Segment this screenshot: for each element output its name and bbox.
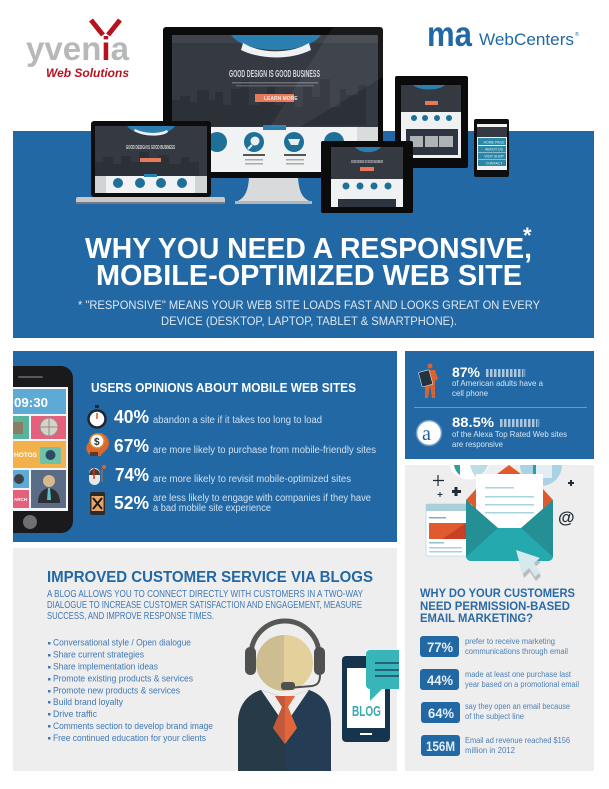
stat row: 40%: abandon a site if it takes too long to load <box>153 415 322 426</box>
text: blog intro: A BLOG ALLOWS YOU TO CONNECT DIRECTLY WITH CUSTOMERS IN A TWO-WAY <box>47 589 363 600</box>
stat: 44%: made at least one purchase last <box>465 670 572 679</box>
stat: 156M: Email ad revenue reached $156 <box>465 736 570 745</box>
heading: users opinions: USERS OPINIONS ABOUT MOBILE WEB SITES <box>91 381 356 395</box>
illustration: email envelope <box>426 465 575 581</box>
stat row: 52%: are less likely to engage with companies if they have <box>153 493 372 504</box>
list: blog benefits: Drive traffic <box>53 709 97 719</box>
panel: blogs <box>13 548 399 771</box>
stat row: 40%: 40% <box>114 406 149 427</box>
stat row: 74% <box>89 464 351 485</box>
list: blog benefits: Promote new products & services <box>53 686 180 696</box>
illustration: email envelope: @ <box>558 508 575 527</box>
stat row: 67%: 67% <box>114 435 149 456</box>
title: WHY YOU NEED A RESPONSIVE, <box>85 233 532 265</box>
title <box>85 223 532 292</box>
device: landscape tablet: GOOD DESIGN IS GOOD BUSINESS <box>351 159 383 164</box>
stat: 64%: say they open an email because <box>465 702 570 711</box>
stat: 88.5%: are responsive <box>452 440 503 449</box>
text: blog intro: SUCCESS, AND IMPROVE RESPONSE TIMES. <box>47 611 214 622</box>
device: smartphone: ABOUT US <box>485 148 504 152</box>
subtitle: * "RESPONSIVE" MEANS YOUR WEB SITE LOADS FAST AND LOOKS GREAT ON EVERY <box>78 298 540 312</box>
stat: 64%: 64% <box>428 705 455 721</box>
stat row: 67% <box>86 433 376 456</box>
device: laptop <box>76 121 225 204</box>
stat: 44%: year based on a promotional email <box>465 680 579 689</box>
logo: yvenia Web Solutions: Web Solutions <box>46 68 129 80</box>
heading: email marketing: NEED PERMISSION-BASED <box>420 599 570 613</box>
logo: yvenia Web Solutions: yvenia <box>26 30 130 67</box>
text: blog intro: DIALOGUE TO INCREASE CUSTOMER SATISFACTION AND ENGAGEMENT, MEASURE <box>47 600 362 611</box>
stat row: 52% <box>90 492 372 515</box>
logo: MA WebCenters <box>427 15 579 54</box>
stat row: 52%: a bad mobile site experience <box>153 503 272 514</box>
list: blog benefits: Promote existing products & services <box>53 674 193 684</box>
stat: 77%: prefer to receive marketing <box>465 637 555 646</box>
device: desktop monitor: LEARN MORE <box>264 96 298 102</box>
stat: 77%: communications through email <box>465 647 568 656</box>
icon: Alexa logo: a <box>422 423 431 445</box>
stat row: 52%: 52% <box>114 492 149 513</box>
stat: 88.5%: 88.5% <box>452 414 495 430</box>
illustration: phone with tiles: HOTOS <box>14 452 38 459</box>
list: blog benefits: Share implementation ideas <box>53 662 158 672</box>
list: blog benefits: Build brand loyalty <box>53 697 123 707</box>
illustration: phone with tiles <box>13 366 73 533</box>
illustration: phone with BLOG speech bubble: BLOG <box>352 703 381 720</box>
panel: cell phone and Alexa stats <box>405 351 594 459</box>
list: blog benefits: Share current strategies <box>53 650 144 660</box>
stat: 87%: cell phone <box>452 389 488 398</box>
illustration: support agent with headset <box>238 621 331 771</box>
device: landscape tablet <box>321 141 413 213</box>
illustration: phone with tiles: ARCH <box>14 497 27 502</box>
stat: 156M: 156M <box>426 739 455 754</box>
device: smartphone: CONTACT <box>486 162 503 166</box>
device: smartphone: VISIT SHOP <box>484 154 504 158</box>
stat: 87%: 87% <box>452 364 481 380</box>
subtitle <box>78 298 540 328</box>
panel: email marketing <box>405 465 594 771</box>
logo: MA WebCenters: WebCenters <box>479 30 574 49</box>
panel: hero background <box>13 131 594 338</box>
device: laptop: GOOD DESIGN IS GOOD BUSINESS <box>126 145 175 151</box>
stat row: 74%: are more likely to revisit mobile-optimized sites <box>153 474 351 485</box>
stat: 44%: 44% <box>427 672 454 688</box>
stat: 88.5% <box>452 414 567 449</box>
stat: 77%: 77% <box>427 639 454 655</box>
title: * <box>523 223 532 248</box>
title: MOBILE-OPTIMIZED WEB SITE <box>96 260 522 292</box>
heading: blogs: IMPROVED CUSTOMER SERVICE VIA BLOGS <box>47 569 373 586</box>
heading: email marketing <box>420 586 575 625</box>
stat: 64% <box>421 702 570 723</box>
text: blog intro <box>47 589 363 622</box>
stat: 87% <box>452 364 543 398</box>
stat row: 67%: are more likely to purchase from mobile-friendly sites <box>153 445 376 456</box>
logo: yvenia Web Solutions <box>26 20 130 80</box>
stat: 77% <box>420 636 568 657</box>
stat: 64%: of the subject line <box>465 712 525 721</box>
panel: users opinions <box>13 351 397 542</box>
illustration: phone with tiles: 09:30 <box>14 395 48 410</box>
stat: 88.5%: of the Alexa Top Rated Web sites <box>452 430 567 439</box>
device: smartphone <box>474 119 509 177</box>
heading: email marketing: WHY DO YOUR CUSTOMERS <box>420 586 575 600</box>
logo: MA WebCenters: ma <box>427 15 472 54</box>
list: blog benefits: Conversational style / Open dialogue <box>53 638 191 648</box>
stat row: 67%: $ <box>94 437 100 448</box>
illustration: phone with BLOG speech bubble <box>342 650 399 742</box>
list: blog benefits: Free continued education for your clients <box>53 733 206 743</box>
device: portrait tablet <box>395 76 468 168</box>
stat: 156M <box>421 735 570 756</box>
device: desktop monitor <box>163 27 383 204</box>
list: blog benefits <box>48 638 213 743</box>
stat: 156M: million in 2012 <box>465 746 516 755</box>
logo: MA WebCenters: ® <box>575 31 579 38</box>
list: blog benefits: Comments section to develop brand image <box>53 721 213 731</box>
heading: email marketing: EMAIL MARKETING? <box>420 611 533 625</box>
device: smartphone: HOME PAGE <box>484 140 505 144</box>
icon: Alexa logo <box>416 420 442 446</box>
stat row: 74%: 74% <box>115 464 149 485</box>
device: desktop monitor: GOOD DESIGN IS GOOD BUSINESS <box>229 69 320 80</box>
stat row: 40% <box>88 405 322 428</box>
stat: 87%: of American adults have a <box>452 379 543 388</box>
icon: man holding phone <box>418 364 438 398</box>
stat: 44% <box>420 669 579 690</box>
subtitle: DEVICE (DESKTOP, LAPTOP, TABLET & SMARTPHONE). <box>161 314 457 328</box>
